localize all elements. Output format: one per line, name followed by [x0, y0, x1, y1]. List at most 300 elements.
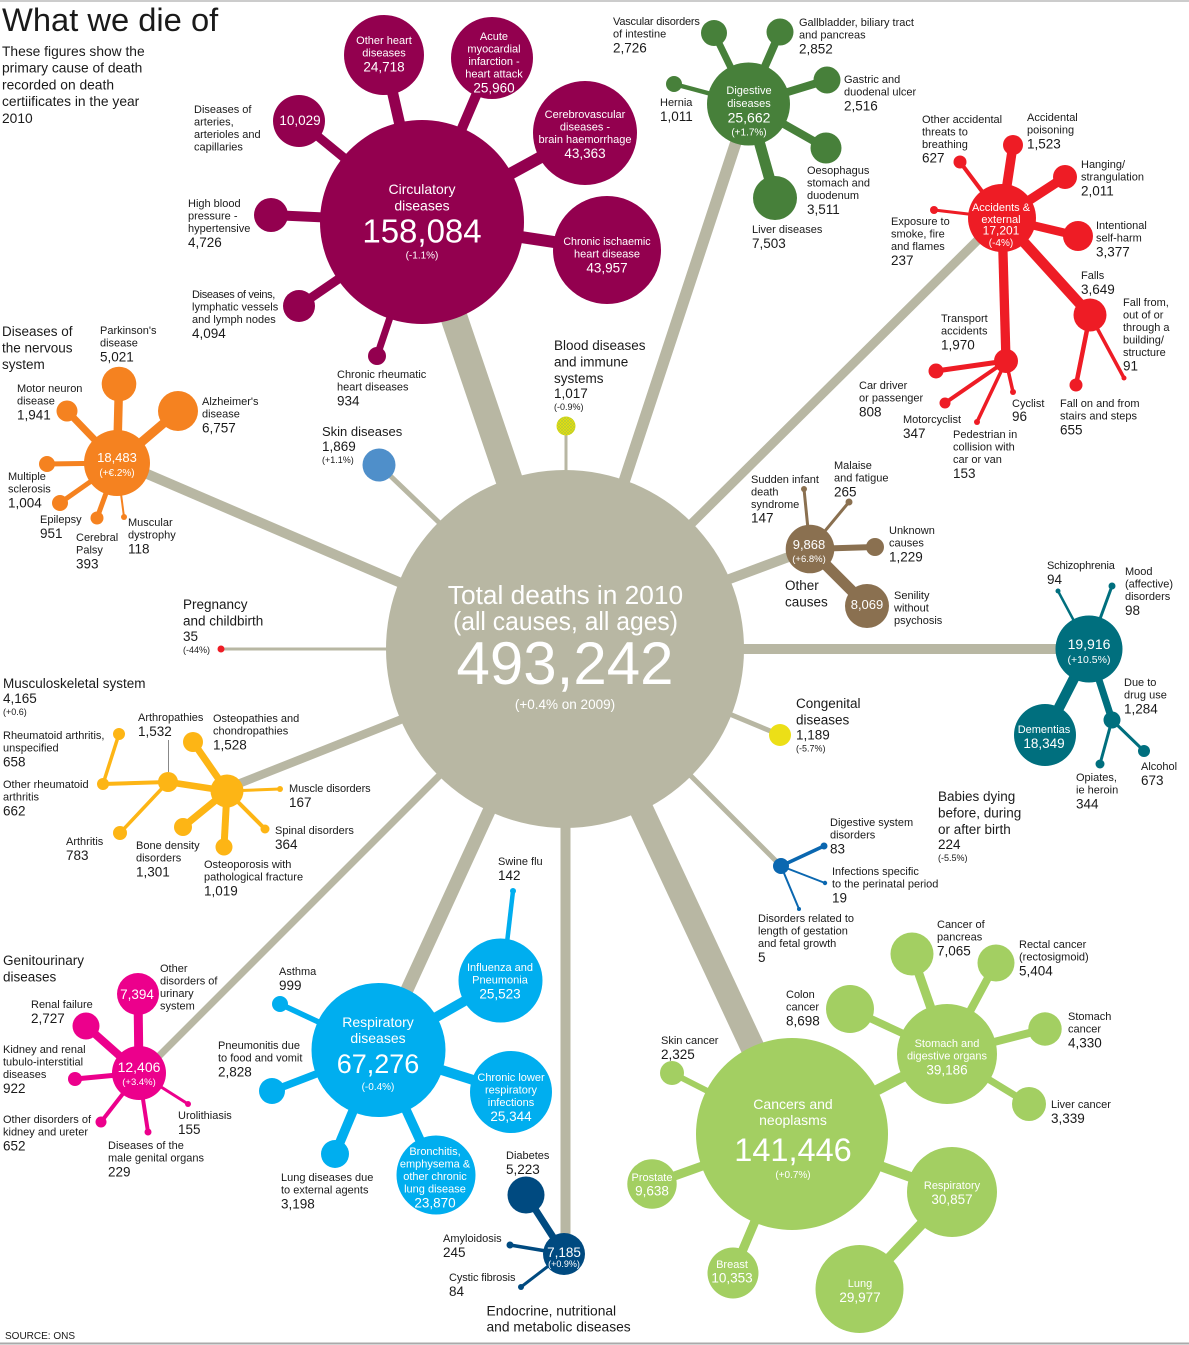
- label: rheumatic: 934: [337, 394, 360, 408]
- label: pedestrian: 153: [953, 466, 976, 481]
- label: senility: psychosis: [894, 615, 943, 627]
- label: stomach and digestive: Stomach and: [915, 1038, 979, 1050]
- label: kidney and ureter: Other disorders of: [3, 1114, 92, 1126]
- label: parkinson's: 5,021: [100, 350, 134, 364]
- label: circulatory total: 158,084: [362, 212, 482, 250]
- label: stomach and digestive: digestive organs: [907, 1050, 988, 1062]
- label: liver cancer: Liver cancer: [1051, 1099, 1111, 1111]
- label: accidents total: 17,201: [983, 224, 1020, 238]
- label: other heart diseases: diseases: [362, 48, 406, 60]
- panel: mental disorders: [1014, 560, 1177, 812]
- label: gestation: Disorders related to: [758, 913, 854, 925]
- label: stairs: Fall on and from: [1060, 398, 1139, 410]
- label: cerebrovascular: brain haemorrhage: [539, 134, 631, 146]
- label: other rheumatoid: arthritis: [3, 792, 40, 804]
- label: mental total: 19,916: [1068, 636, 1111, 652]
- label: palsy: Palsy: [76, 544, 103, 556]
- label: gallbladder: Gallbladder, biliary tract: [799, 17, 914, 29]
- label: rheumatoid arthritis: 658: [3, 754, 26, 770]
- label: hernia: Hernia: [660, 97, 693, 109]
- label: dementias: 18,349: [1023, 736, 1065, 751]
- label: chronic lower: respiratory: [485, 1084, 537, 1096]
- label: sudden infant: 147: [751, 510, 774, 526]
- label: digestive total: 25,662: [728, 110, 771, 126]
- label: hypertensive: 4,726: [188, 235, 222, 250]
- label: pancreas: Cancer of: [937, 919, 986, 931]
- label: other rheumatoid: 662: [3, 804, 26, 818]
- label: motorcyclist: Motorcyclist: [903, 414, 961, 426]
- intro text: primary cause of death: [2, 61, 142, 76]
- label: babies heading: before, during: [938, 806, 1021, 820]
- label: skin cancer: Skin cancer: [661, 1035, 719, 1047]
- label: fall from: 91: [1123, 358, 1138, 374]
- label: genitourinary heading: Genitourinary: [3, 953, 84, 968]
- label: breathing: Other accidental: [922, 114, 1002, 126]
- label: exposure: smoke, fire: [891, 228, 945, 240]
- label: gestation: and fetal growth: [758, 938, 836, 950]
- label: arteries: arterioles and: [194, 129, 261, 141]
- label: respiratory cancer: Respiratory: [924, 1180, 981, 1192]
- label: stomach cancer: 4,330: [1068, 1036, 1102, 1050]
- label: muscle disorders: Muscle disorders: [289, 783, 371, 795]
- label: hypertensive: High blood: [188, 198, 241, 210]
- label: pneumonitis: 2,828: [218, 1064, 252, 1080]
- label: cancers total: neoplasms: [759, 1112, 827, 1128]
- panel: congenital diseases: 1,189: [796, 728, 830, 742]
- label: hypertensive: pressure -: [188, 210, 238, 222]
- label: ms: Multiple: [8, 471, 46, 483]
- label: other rheumatoid: Other rheumatoid: [3, 779, 89, 791]
- label: other causes heading: Other: [785, 578, 819, 593]
- panel: respiratory diseases: [218, 856, 552, 1214]
- label: nervous heading: the nervous: [2, 340, 73, 356]
- label: pancreas: pancreas: [937, 932, 983, 944]
- label: respiratory total: Respiratory: [342, 1014, 414, 1030]
- label: dystrophy: 118: [128, 542, 150, 556]
- panel: blood diseases: 1,017: [554, 386, 588, 401]
- label: osteopathies: Osteopathies and: [213, 713, 299, 725]
- label: male genital: Diseases of the: [108, 1140, 184, 1152]
- label: male genital: 229: [108, 1164, 131, 1180]
- label: kidney and ureter: kidney and ureter: [3, 1126, 88, 1138]
- label: mental total: (+10.5%): [1068, 654, 1110, 666]
- label: palsy: Cerebral: [76, 532, 118, 544]
- label: muscle disorders: 167: [289, 795, 312, 810]
- label: palsy: 393: [76, 556, 99, 572]
- label: drug use: 1,284: [1124, 702, 1158, 716]
- label: sudden infant: death: [751, 486, 779, 498]
- label: rheumatic: Chronic rheumatic: [337, 369, 427, 381]
- label: amyloidosis: 245: [443, 1245, 466, 1260]
- label: cystic fibrosis: 84: [449, 1284, 465, 1299]
- source: SOURCE: ONS: [5, 1331, 75, 1342]
- label: lung: Lung: [848, 1278, 872, 1290]
- label: swine flu: 142: [498, 868, 521, 883]
- label: cerebrovascular: Cerebrovascular: [545, 109, 626, 121]
- label: alzheimer's: Alzheimer's: [202, 396, 259, 408]
- label: pedestrian: car or van: [953, 454, 1002, 466]
- panel: musculoskeletal system: [3, 676, 371, 898]
- label: renal failure: 2,727: [31, 1011, 65, 1026]
- label: cancers total: (+0.7%): [775, 1170, 811, 1181]
- label: stomach cancer: Stomach: [1068, 1011, 1111, 1023]
- label: stairs: stairs and steps: [1060, 410, 1138, 422]
- label: osteoporosis: Osteoporosis with: [204, 859, 291, 871]
- label: kidney: tubulo-interstitial: [3, 1056, 83, 1068]
- label: pancreas: 7,065: [937, 944, 971, 958]
- label: accidents total: Accidents &: [972, 202, 1031, 214]
- label: parkinson's: Parkinson's: [100, 325, 157, 337]
- label: cancers total: 141,446: [734, 1132, 852, 1168]
- label: hanging: Hanging/: [1081, 159, 1126, 171]
- panel: pregnancy: and childbirth: [183, 614, 263, 628]
- label: kidney and ureter: 652: [3, 1138, 26, 1154]
- intro text: 2010: [2, 111, 33, 126]
- label: digestive system disorders: 83: [830, 842, 845, 856]
- panel: congenital diseases: Congenital: [796, 696, 861, 711]
- label: fall from: structure: [1123, 347, 1166, 359]
- connectors from centre: [117, 130, 1075, 1245]
- label: genitourinary heading: diseases: [3, 970, 57, 984]
- label: bronchitis: lung disease: [404, 1184, 466, 1196]
- label: falls: Falls: [1081, 270, 1105, 282]
- intro text: recorded on death: [2, 77, 114, 92]
- label: alzheimer's: 6,757: [202, 420, 236, 436]
- label: pneumonitis: to food and vomit: [218, 1052, 302, 1064]
- label: senility value: 8,069: [851, 597, 883, 612]
- label: bronchitis: emphysema &: [400, 1158, 471, 1170]
- label: 10,029: 10,029: [279, 113, 321, 128]
- label: heart attack: myocardial: [467, 44, 521, 56]
- label: veins: lymphatic vessels: [192, 302, 279, 314]
- label: senility: without: [893, 602, 929, 614]
- label: self-harm: self-harm: [1096, 232, 1142, 244]
- label: mood: disorders: [1125, 591, 1171, 603]
- label: hernia: 1,011: [660, 109, 693, 124]
- label: motor neuron: disease: [17, 396, 55, 408]
- label: opiates: 344: [1076, 796, 1099, 812]
- label: ms: 1,004: [8, 496, 42, 510]
- label: other urinary: urinary: [160, 988, 194, 1000]
- label: breathing: breathing: [922, 139, 968, 151]
- label: chronic lower: infections: [488, 1097, 535, 1109]
- label: other causes total: 9,868: [793, 537, 825, 552]
- label: respiratory total: (-0.4%): [362, 1082, 394, 1093]
- label: pedestrian: Pedestrian in: [953, 429, 1017, 441]
- label: prostate: Prostate: [632, 1172, 672, 1184]
- panel: congenital diseases: (-5.7%): [796, 744, 826, 754]
- label: cancers total: Cancers and: [753, 1096, 833, 1112]
- label: heart attack: infarction -: [468, 56, 520, 68]
- label: car driver: Car driver: [859, 380, 908, 392]
- label: poisoning: poisoning: [1027, 124, 1074, 136]
- label: unknown: causes: [889, 538, 924, 550]
- label: gestation: 5: [758, 950, 766, 965]
- label: heart attack: Acute: [480, 31, 508, 43]
- label: oesophagus: 3,511: [807, 202, 840, 217]
- label: rectal: 5,404: [1019, 964, 1053, 978]
- label: respiratory total: 67,276: [337, 1049, 419, 1079]
- panel: pregnancy: Pregnancy: [183, 597, 248, 612]
- label: breathing: threats to: [922, 126, 968, 138]
- label: transport: 1,970: [941, 338, 975, 352]
- label: musculoskeletal heading: (+0.6): [3, 707, 27, 717]
- label: skin cancer: 2,325: [661, 1047, 695, 1062]
- label: exposure: and flames: [891, 241, 945, 253]
- label: endocrine total: (+0.9%): [548, 1259, 580, 1269]
- label: kidney: Kidney and renal: [3, 1044, 86, 1056]
- label: other urinary: disorders of: [160, 976, 218, 988]
- label: bronchitis: 23,870: [414, 1196, 456, 1210]
- label: dystrophy: dystrophy: [128, 530, 176, 542]
- label: malaise: Malaise: [834, 460, 872, 472]
- label: other heart diseases: 24,718: [363, 60, 405, 74]
- label: musculoskeletal heading: 4,165: [3, 691, 37, 706]
- label: alcohol: Alcohol: [1141, 761, 1177, 773]
- label: oesophagus: stomach and: [807, 178, 870, 190]
- panel: skin diseases: (+1.1%): [322, 455, 354, 465]
- label: musculoskeletal heading: Musculoskeletal system: [3, 676, 146, 691]
- label: stomach and digestive: 39,186: [926, 1062, 968, 1078]
- label: stomach cancer: cancer: [1068, 1024, 1101, 1036]
- label: arteries: Diseases of: [194, 104, 252, 116]
- label: urolithiasis: Urolithiasis: [178, 1110, 232, 1122]
- label: swine flu: Swine flu: [498, 856, 543, 868]
- label: cerebrovascular: diseases -: [560, 122, 610, 134]
- label: other urinary: Other: [160, 963, 188, 975]
- label: mood: Mood: [1125, 566, 1153, 578]
- label: babies heading: (-5.5%): [938, 853, 968, 863]
- label: rheumatoid arthritis: Rheumatoid arthritis,: [3, 730, 104, 742]
- centre circle: total deaths: (all causes, all ages): [453, 606, 678, 636]
- label: mood: 98: [1125, 603, 1140, 618]
- label: breathing: 627: [922, 150, 945, 166]
- label: urolithiasis: 155: [178, 1122, 201, 1137]
- label: chronic lower: Chronic lower: [477, 1072, 545, 1084]
- label: fall from: out of or: [1123, 310, 1164, 322]
- panel: circulatory diseases: [188, 15, 661, 408]
- label: perinatal: 19: [832, 890, 847, 906]
- label: transport: Transport: [941, 313, 988, 325]
- label: cerebrovascular: 43,363: [564, 146, 606, 161]
- label: epilepsy: Epilepsy: [40, 514, 82, 526]
- label: bone density: Bone density: [136, 840, 200, 852]
- label: nervous total: 18,483: [97, 450, 137, 465]
- label: dementias: Dementias: [1018, 724, 1071, 736]
- label: diabetes: Diabetes: [506, 1150, 550, 1162]
- label: diabetes: 5,223: [506, 1162, 540, 1177]
- label: genitourinary total: 12,406: [118, 1059, 161, 1075]
- label: sudden infant: Sudden infant: [751, 474, 819, 486]
- panel: nervous system: [2, 324, 259, 572]
- panel: digestive diseases: [613, 16, 917, 251]
- label: opiates: ie heroin: [1076, 784, 1118, 796]
- label: unknown: Unknown: [889, 525, 935, 537]
- panel: endocrine diseases: [443, 1150, 631, 1334]
- label: fall from: through a: [1123, 322, 1170, 334]
- label: male genital: male genital organs: [108, 1152, 205, 1164]
- label: external agents: 3,198: [281, 1196, 315, 1212]
- label: arthritis: 783: [66, 848, 89, 863]
- label: exposure: 237: [891, 253, 914, 268]
- label: nervous heading: system: [2, 357, 45, 372]
- label: falls: 3,649: [1081, 282, 1115, 297]
- label: liver cancer: 3,339: [1051, 1111, 1085, 1126]
- centre circle: total deaths: Total deaths in 2010: [448, 580, 683, 610]
- label: car driver: 808: [859, 404, 882, 420]
- label: transport: accidents: [941, 326, 988, 338]
- label: gallbladder: and pancreas: [799, 30, 866, 42]
- panel: congenital diseases: [769, 696, 861, 754]
- panel: cancers and neoplasms: [627, 919, 1111, 1333]
- panel: genitourinary diseases: [3, 953, 232, 1180]
- label: nervous total: (+€.2%): [99, 468, 135, 479]
- label: ischaemic: heart disease: [574, 248, 640, 260]
- label: car driver: or passenger: [859, 392, 924, 404]
- label: nervous heading: Diseases of: [2, 324, 73, 339]
- label: cyclist: Cyclist: [1012, 398, 1044, 410]
- label: hanging: strangulation: [1081, 172, 1144, 184]
- label: rheumatic: heart diseases: [337, 382, 409, 394]
- label: gastric: 2,516: [844, 98, 878, 114]
- panel: blood diseases: systems: [554, 371, 604, 386]
- label: 7,394: 7,394: [120, 987, 154, 1002]
- centre circle: total deaths: (+0.4% on 2009): [515, 697, 615, 712]
- panel: pregnancy: 35: [183, 629, 198, 644]
- label: digestive system disorders: Digestive system: [830, 817, 913, 829]
- label: parkinson's: disease: [100, 338, 138, 350]
- title: What we die of: [2, 1, 219, 38]
- panel: accidents and external: [859, 112, 1170, 481]
- label: alcohol: 673: [1141, 773, 1164, 788]
- label: lung: 29,977: [839, 1290, 881, 1305]
- panel: skin diseases: [322, 424, 403, 482]
- label: poisoning: Accidental: [1027, 112, 1078, 124]
- label: arthropathies: 1,532: [138, 724, 172, 739]
- label: other urinary: system: [160, 1000, 195, 1012]
- label: digestive total: (+1.7%): [731, 128, 767, 138]
- label: oesophagus: duodenum: [807, 190, 859, 202]
- label: bone density: 1,301: [136, 864, 170, 880]
- label: kidney: diseases: [3, 1069, 47, 1081]
- panel: pregnancy: (-44%): [183, 645, 210, 655]
- label: gastric: duodenal ulcer: [844, 86, 917, 98]
- label: gestation: length of gestation: [758, 926, 848, 938]
- label: asthma: 999: [279, 978, 302, 993]
- label: schizophrenia: 94: [1047, 572, 1063, 587]
- label: arthropathies: Arthropathies: [138, 712, 204, 724]
- label: arteries: capillaries: [194, 142, 243, 154]
- label: malaise: 265: [834, 484, 857, 500]
- panel: skin diseases: 1,869: [322, 439, 356, 454]
- panel: babies dying: [758, 789, 1021, 965]
- label: external agents: to external agents: [281, 1184, 369, 1196]
- label: ischaemic: Chronic ischaemic: [563, 236, 651, 248]
- panel: skin diseases: Skin diseases: [322, 424, 403, 439]
- label: veins: Diseases of veins,: [192, 289, 275, 301]
- label: bronchitis: Bronchitis,: [409, 1146, 461, 1158]
- label: opiates: Opiates,: [1076, 772, 1117, 784]
- panel: blood diseases: (-0.9%): [554, 402, 584, 412]
- label: senility: Senility: [894, 590, 930, 602]
- label: veins: 4,094: [192, 326, 226, 341]
- label: stairs: 655: [1060, 422, 1083, 438]
- label: colon: 8,698: [786, 1014, 820, 1028]
- label: influenza: Pneumonia: [472, 974, 529, 986]
- label: spinal: 364: [275, 837, 298, 852]
- label: intestine: Vascular disorders: [613, 16, 700, 28]
- label: drug use: drug use: [1124, 690, 1167, 702]
- label: fall from: building/: [1123, 334, 1165, 346]
- label: osteopathies: chondropathies: [213, 726, 289, 738]
- label: prostate: 9,638: [635, 1184, 669, 1198]
- label: endocrine total: 7,185: [547, 1245, 581, 1260]
- label: respiratory total: diseases: [350, 1030, 406, 1046]
- label: endocrine heading: and metabolic diseases: [486, 1320, 631, 1334]
- label: self-harm: Intentional: [1096, 220, 1147, 232]
- label: kidney: 922: [3, 1081, 26, 1096]
- panel: blood diseases: and immune: [554, 354, 628, 370]
- label: exposure: Exposure to: [891, 216, 950, 228]
- label: motorcyclist: 347: [903, 426, 926, 441]
- label: heart attack: heart attack: [465, 68, 523, 80]
- label: ms: sclerosis: [8, 484, 51, 496]
- label: cystic fibrosis: Cystic fibrosis: [449, 1272, 516, 1284]
- panel: blood diseases: Blood diseases: [554, 338, 646, 353]
- label: unknown: 1,229: [889, 550, 923, 564]
- label: colon: Colon: [786, 989, 815, 1001]
- panel: congenital diseases: diseases: [796, 712, 850, 728]
- label: heart attack: 25,960: [473, 80, 515, 96]
- label: other causes heading: causes: [785, 594, 828, 610]
- centre circle: total deaths: 493,242: [457, 630, 673, 697]
- label: breast: 10,353: [711, 1270, 753, 1286]
- label: rheumatoid arthritis: unspecified: [3, 742, 59, 754]
- label: babies heading: or after birth: [938, 822, 1011, 837]
- label: self-harm: 3,377: [1096, 244, 1130, 260]
- label: babies heading: Babies dying: [938, 789, 1015, 804]
- label: gallbladder: 2,852: [799, 42, 833, 56]
- label: alzheimer's: disease: [202, 408, 240, 420]
- label: accidents total: (-4%): [989, 238, 1013, 249]
- label: influenza: 25,523: [479, 986, 521, 1002]
- label: malaise: and fatigue: [834, 472, 888, 484]
- label: oesophagus: Oesophagus: [807, 165, 870, 177]
- intro text: certiificates in the year: [2, 94, 140, 109]
- label: babies heading: 224: [938, 837, 961, 852]
- label: rectal: (rectosigmoid): [1019, 952, 1089, 964]
- label: asthma: Asthma: [279, 966, 317, 978]
- label: mood: (affective): [1125, 578, 1173, 590]
- label: digestive total: diseases: [727, 98, 771, 110]
- label: respiratory cancer: 30,857: [931, 1192, 973, 1207]
- label: poisoning: 1,523: [1027, 136, 1061, 152]
- label: schizophrenia: Schizophrenia: [1047, 560, 1116, 572]
- label: dystrophy: Muscular: [128, 517, 173, 529]
- label: circulatory total: (-1.1%): [406, 250, 438, 262]
- label: cyclist: 96: [1012, 409, 1027, 424]
- label: breast: Breast: [716, 1259, 748, 1271]
- label: influenza: Influenza and: [467, 962, 533, 974]
- label: gastric: Gastric and: [844, 74, 900, 86]
- label: colon: cancer: [786, 1002, 819, 1014]
- label: other causes total: (+6.8%): [792, 554, 826, 565]
- label: accidents total: external: [981, 214, 1021, 226]
- label: liver: Liver diseases: [752, 224, 823, 236]
- panel: pregnancy: [183, 597, 263, 655]
- label: intestine: of intestine: [613, 28, 666, 40]
- label: ischaemic: 43,957: [586, 260, 628, 276]
